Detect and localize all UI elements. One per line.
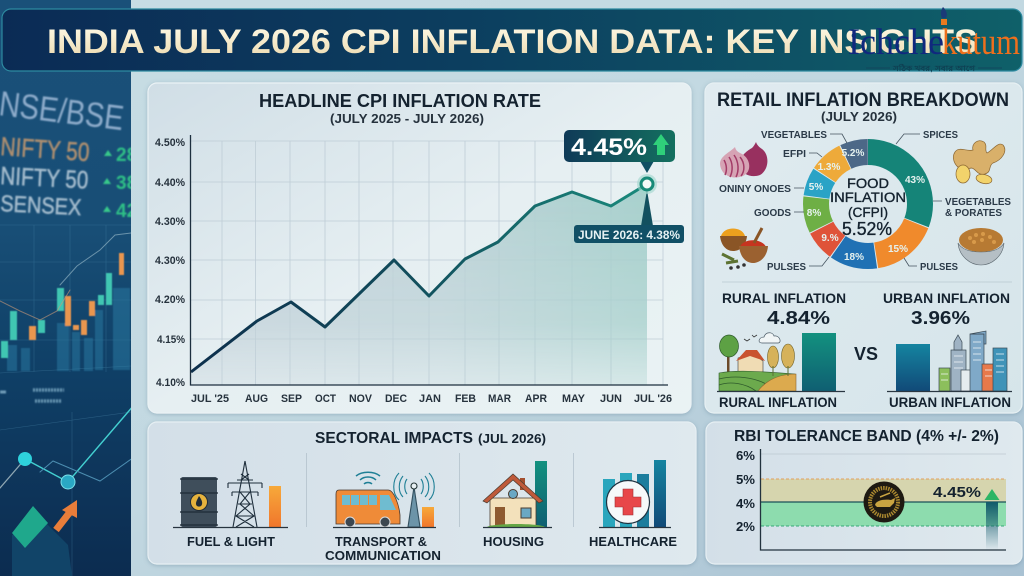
donut centre: food inflation: (CFPI) — [848, 204, 888, 220]
RBI heading: RBI TOLERANCE BAND (4% +/- 2%) — [734, 428, 999, 445]
retail subheading: (JULY 2026) — [821, 110, 897, 124]
urban inflation — [883, 290, 1012, 410]
divider — [722, 281, 1012, 283]
marker: July 2026 point — [637, 174, 657, 194]
market text — [0, 84, 137, 401]
y axis labels — [155, 137, 185, 389]
sector: transport and communication — [325, 472, 441, 563]
callout: 4.45% — [564, 130, 675, 173]
sector heading date: (JUL 2026) — [478, 432, 546, 446]
urban inflation: URBAN INFLATION — [883, 290, 1010, 306]
y axis labels: 2% — [736, 519, 755, 534]
y axis labels: 4.20% — [155, 294, 185, 306]
x axis labels: SEP — [281, 393, 302, 405]
icon: rising arrow — [12, 500, 77, 576]
market text: NIFTY 50 — [0, 131, 90, 167]
donut labels and leaders: ONINY ONOES — [719, 183, 791, 195]
value label: 4.45% — [933, 484, 981, 501]
x axis labels: JUN — [600, 393, 622, 405]
donut labels and leaders: SPICES — [923, 129, 958, 141]
chart subheading: (JULY 2025 - JULY 2026) — [330, 112, 484, 126]
vs label: VS — [854, 344, 878, 364]
y axis labels: 5% — [736, 472, 755, 487]
x axis labels: APR — [525, 393, 547, 405]
x axis labels: FEB — [455, 393, 476, 405]
arrow: value marker — [984, 489, 1000, 550]
donut chart — [807, 148, 925, 263]
callout: 4.45%: 4.45% — [571, 134, 647, 161]
grid — [191, 141, 663, 385]
panel: sectoral impacts — [148, 422, 696, 564]
y axis labels: 4.50% — [155, 137, 185, 149]
panel: retail inflation breakdown — [705, 83, 1022, 413]
donut segment labels: 5% — [809, 182, 823, 193]
sector: fuel and light — [173, 461, 288, 549]
donut labels and leaders: PULSES — [767, 261, 806, 273]
y axis labels: 4.15% — [157, 334, 185, 346]
bar: transport — [422, 507, 434, 527]
title banner — [2, 9, 1022, 71]
x axis labels: JUL '26 — [634, 393, 672, 405]
x axis labels: JUL '25 — [191, 393, 229, 405]
donut centre: food inflation: FOOD — [847, 175, 889, 191]
chart heading: HEADLINE CPI INFLATION RATE — [259, 91, 541, 111]
bars: healthcare — [603, 460, 666, 527]
donut centre: food inflation: INFLATION — [830, 189, 906, 205]
market trend lines — [0, 232, 131, 490]
donut segment labels: 18% — [844, 252, 864, 263]
band: lower — [761, 502, 1006, 526]
x axis labels: DEC — [385, 393, 407, 405]
icon: RBI seal — [864, 482, 904, 522]
y axis labels: 6% — [736, 448, 755, 463]
donut labels and leaders: PULSES — [920, 261, 958, 273]
x axis labels: AUG — [245, 393, 268, 405]
icon: rural landscape — [719, 333, 796, 391]
sector: healthcare — [589, 460, 677, 549]
rural inflation: RURAL INFLATION — [719, 395, 837, 410]
sector: transport and communication: COMMUNICATION — [325, 548, 441, 563]
sector: healthcare: HEALTHCARE — [589, 534, 677, 549]
callout: June 2026 value — [574, 225, 684, 243]
icon: city skyline — [939, 331, 1007, 391]
icon: onions — [720, 142, 767, 178]
sector: transport and communication: TRANSPORT & — [335, 534, 427, 549]
market text: NIFTY 50 — [0, 162, 89, 195]
x axis labels — [191, 393, 672, 405]
x axis labels: NOV — [349, 393, 373, 405]
donut segment labels: 15% — [888, 244, 908, 255]
line: CPI series — [191, 184, 647, 372]
band: upper — [761, 479, 1006, 502]
icon: power pylon — [228, 461, 262, 527]
panel: market data backdrop — [0, 0, 131, 576]
panel: headline CPI chart — [148, 83, 691, 413]
June pointer — [641, 190, 653, 226]
y axis labels: 4% — [736, 496, 755, 511]
donut segment labels — [807, 148, 925, 263]
market text: SENSEX — [0, 190, 82, 220]
donut labels and leaders: GOODS — [754, 207, 791, 219]
market text: NSE/BSE — [0, 84, 126, 138]
x axis labels: MAY — [562, 393, 586, 405]
donut labels and leaders — [719, 129, 1011, 273]
icon: lentil bowl — [958, 228, 1004, 265]
donut labels and leaders: VEGETABLES — [945, 196, 1011, 208]
bar: urban — [896, 344, 930, 391]
icon: bus — [336, 490, 400, 527]
x axis labels: JAN — [419, 393, 441, 405]
x axis labels: OCT — [315, 393, 336, 405]
market text: 38 — [116, 173, 137, 194]
sector: fuel and light: FUEL & LIGHT — [187, 534, 275, 549]
market text: 28 — [116, 145, 137, 166]
rural inflation: RURAL INFLATION — [722, 290, 846, 306]
logo: Ichchekutum: সঠিক খবর, সবার আগে — [892, 62, 976, 73]
sector heading: SECTORAL IMPACTS — [315, 430, 473, 447]
logo: Ichchekutum: Ichche — [848, 22, 944, 63]
y axis labels — [736, 448, 755, 534]
donut centre: food inflation — [830, 175, 906, 239]
y axis labels: 4.10% — [156, 377, 185, 389]
retail heading: RETAIL INFLATION BREAKDOWN — [717, 90, 1009, 111]
y axis labels: 4.30% — [155, 216, 185, 228]
area under line — [191, 184, 647, 385]
icon: wifi — [356, 472, 380, 484]
icon: oil barrel — [180, 477, 218, 527]
donut labels and leaders: & PORATES — [945, 207, 1002, 219]
icon: spice bowls — [720, 228, 768, 270]
icon: ginger — [953, 141, 1005, 185]
urban inflation: URBAN INFLATION — [889, 395, 1011, 410]
panel: RBI tolerance band — [706, 422, 1022, 564]
bar: rural — [802, 333, 836, 391]
rural inflation: 4.84% — [767, 308, 830, 328]
sector: housing: HOUSING — [483, 534, 544, 549]
title: INDIA JULY 2026 CPI INFLATION DATA: KEY INSIGHTS — [47, 23, 978, 61]
donut segment labels: 1.3% — [818, 162, 841, 173]
candlestick chart — [1, 253, 130, 371]
donut labels and leaders: EFPI — [783, 148, 806, 160]
axes — [190, 135, 668, 385]
donut segment labels: 43% — [905, 175, 925, 186]
bar: fuel — [269, 486, 281, 527]
donut segment labels: 8% — [807, 208, 821, 219]
icon: house — [483, 474, 545, 527]
donut segment labels: 9.% — [821, 233, 839, 244]
donut segment labels: 5.2% — [842, 148, 865, 159]
donut centre: food inflation: 5.52% — [842, 219, 892, 239]
bar: housing — [535, 461, 547, 527]
icon: antenna — [394, 473, 434, 527]
rural inflation — [717, 290, 846, 410]
market text: 42 — [116, 201, 137, 222]
urban inflation: 3.96% — [911, 308, 970, 328]
donut labels and leaders: VEGETABLES — [761, 129, 827, 141]
icon: medical cross — [606, 480, 650, 524]
tolerance band chart — [736, 448, 1006, 550]
callout: June 2026 value: JUNE 2026: 4.38% — [578, 230, 680, 242]
x axis labels: MAR — [488, 393, 511, 405]
y axis labels: 4.40% — [155, 177, 185, 189]
sector: housing — [483, 461, 552, 549]
y axis labels: 4.30% — [155, 255, 185, 267]
logo: Ichchekutum — [848, 7, 1020, 73]
